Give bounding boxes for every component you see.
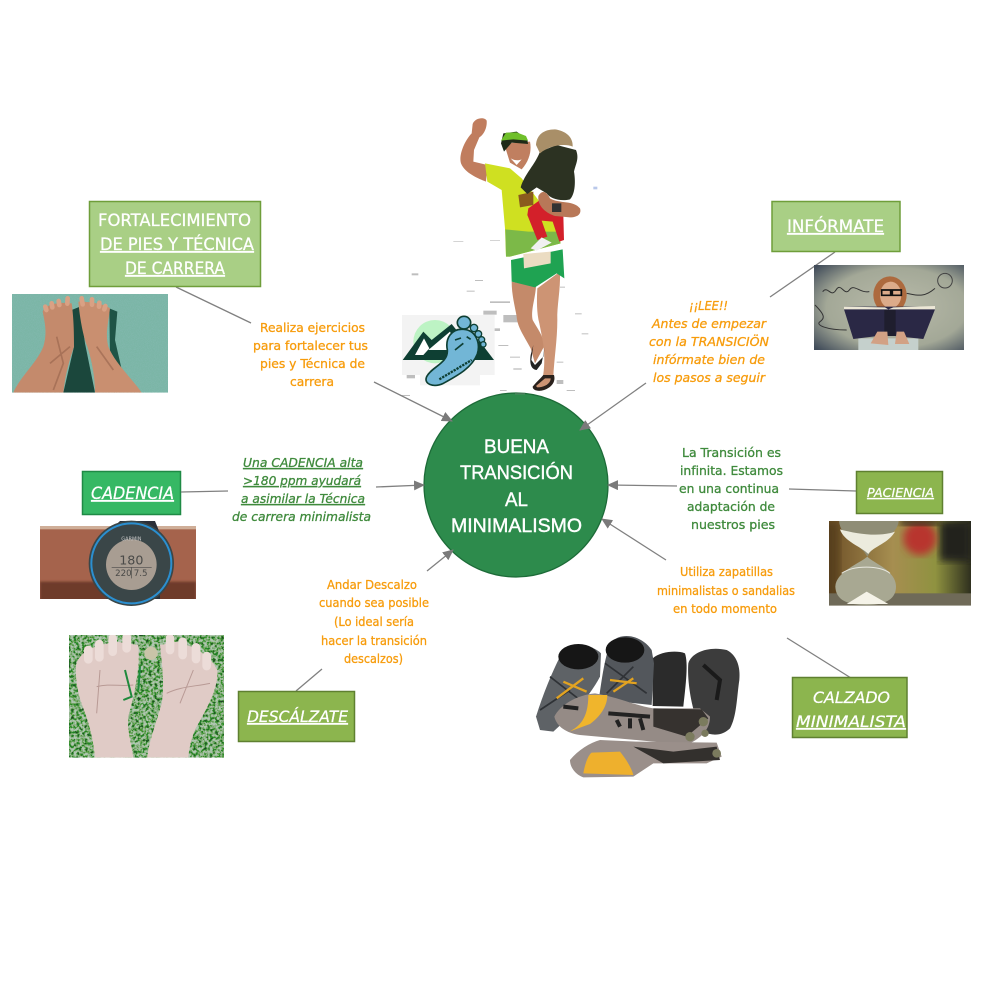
- body text: con la TRANSICIÖN: [649, 333, 770, 349]
- connector: box to text: [176, 287, 251, 323]
- body text: [319, 577, 429, 666]
- panel: calzado minimalista: [536, 519, 907, 777]
- heading box: FORTALECIMIENTO: [98, 211, 251, 230]
- photo: wrist with running watch: 180: [119, 553, 143, 568]
- arrow: to centre: [608, 485, 677, 486]
- panel: infórmate: [580, 202, 964, 430]
- heading box: [772, 202, 900, 252]
- arrow: to centre: [427, 550, 453, 571]
- connector: text to box: [789, 489, 856, 491]
- body text: cuando sea posible: [319, 595, 429, 610]
- body text: [679, 445, 783, 532]
- body text: infinita. Estamos: [680, 463, 783, 478]
- child hoodie: [521, 145, 577, 200]
- heading box: [792, 678, 907, 738]
- heading box: CADENCIA: [91, 484, 174, 503]
- body text: ¡¡LEE!!: [689, 298, 728, 313]
- connector: box to text: [787, 638, 851, 678]
- body text: Andar Descalzo: [327, 577, 417, 592]
- photo: wrist with running watch: [40, 521, 196, 606]
- body text: [657, 564, 795, 616]
- body text: carrera: [290, 374, 334, 389]
- shorts: [511, 249, 564, 287]
- body text: para fortalecer tus: [253, 338, 368, 353]
- connector: box to text: [181, 491, 228, 492]
- arrow: to centre: [376, 485, 424, 487]
- heading box: INFÓRMATE: [787, 217, 884, 236]
- central circle: buena transición al minimalismo: MINIMALISMO: [451, 516, 582, 537]
- legs: [512, 282, 544, 363]
- shirt: [485, 163, 561, 257]
- panel: cadencia: [40, 455, 424, 606]
- panel: paciencia: [608, 445, 971, 606]
- body text: La Transición es: [682, 445, 781, 460]
- body text: pies y Técnica de: [260, 356, 365, 371]
- photo: minimalist shoes and sandals: [536, 636, 740, 777]
- toe shoes: [554, 693, 710, 745]
- body text: descalzos): [344, 651, 403, 666]
- body text: infórmate bien de: [653, 352, 765, 367]
- heading box: [90, 202, 260, 286]
- photo: wrist with running watch: 220: [115, 569, 132, 579]
- photo: bare feet on teal carpet: [12, 294, 168, 393]
- connector: box to text: [296, 669, 322, 691]
- body text: [253, 320, 368, 389]
- trail shoes: [536, 646, 601, 732]
- arrow: to centre: [580, 383, 646, 430]
- heading box: CALZADO: [813, 688, 890, 707]
- body text: en todo momento: [673, 601, 777, 616]
- heading box: [238, 692, 354, 742]
- arrow: to centre: [602, 519, 666, 560]
- arrow: to centre: [374, 382, 452, 421]
- body text: hacer la transición: [321, 633, 427, 648]
- icon: barefoot logo with mountains: [402, 315, 495, 385]
- body text: Una CADENCIA alta: [243, 455, 363, 470]
- body text: Utiliza zapatillas: [680, 564, 773, 579]
- connector: box to text: [770, 252, 835, 297]
- body text: en una continua: [679, 481, 779, 496]
- ground specks: [400, 187, 597, 396]
- body text: (Lo ideal sería: [334, 614, 414, 629]
- body text: [232, 455, 371, 524]
- arm and fist: [460, 118, 487, 182]
- heading box: DESCÁLZATE: [247, 707, 349, 726]
- man's forearm: [538, 192, 580, 217]
- body text: adaptación de: [687, 499, 775, 514]
- child legs and shoe: [527, 200, 564, 242]
- body text: Antes de empezar: [651, 316, 767, 331]
- photo: wrist with running watch: GARMIN: [121, 537, 142, 543]
- heading box: DE PIES Y TÉCNICA: [100, 235, 255, 254]
- sandals: [653, 652, 687, 707]
- panel: fortalecimiento de pies y técnica de carrera: [12, 202, 452, 421]
- photo: bare feet on grass: [69, 635, 224, 758]
- photo: runner carrying child: [400, 118, 597, 396]
- body text: minimalistas o sandalias: [657, 583, 795, 598]
- body text: Realiza ejercicios: [260, 320, 365, 335]
- central circle: buena transición al minimalismo: AL: [505, 490, 528, 511]
- photo: wrist with running watch: 7.5: [134, 569, 148, 579]
- body text: [649, 298, 770, 385]
- body text: los pasos a seguir: [653, 370, 766, 385]
- heading box: DE CARRERA: [125, 259, 226, 278]
- body text: nuestros pies: [691, 517, 775, 532]
- heading box: [856, 472, 942, 514]
- heading box: MINIMALISTA: [796, 712, 906, 731]
- head and cap: [504, 142, 531, 169]
- central circle: buena transición al minimalismo: TRANSICIÓN: [460, 462, 573, 484]
- heading box: PACIENCIA: [867, 485, 934, 500]
- body text: >180 ppm ayudará: [243, 473, 361, 488]
- heading box: [82, 472, 180, 514]
- central circle: buena transición al minimalismo: [424, 393, 608, 577]
- central circle: buena transición al minimalismo: BUENA: [484, 437, 549, 458]
- panel: descálzate: [69, 550, 453, 758]
- photo: woman reading a book: [814, 265, 964, 350]
- body text: a asimilar la Técnica: [241, 491, 365, 506]
- photo: hourglass: [820, 518, 971, 606]
- body text: de carrera minimalista: [232, 509, 371, 524]
